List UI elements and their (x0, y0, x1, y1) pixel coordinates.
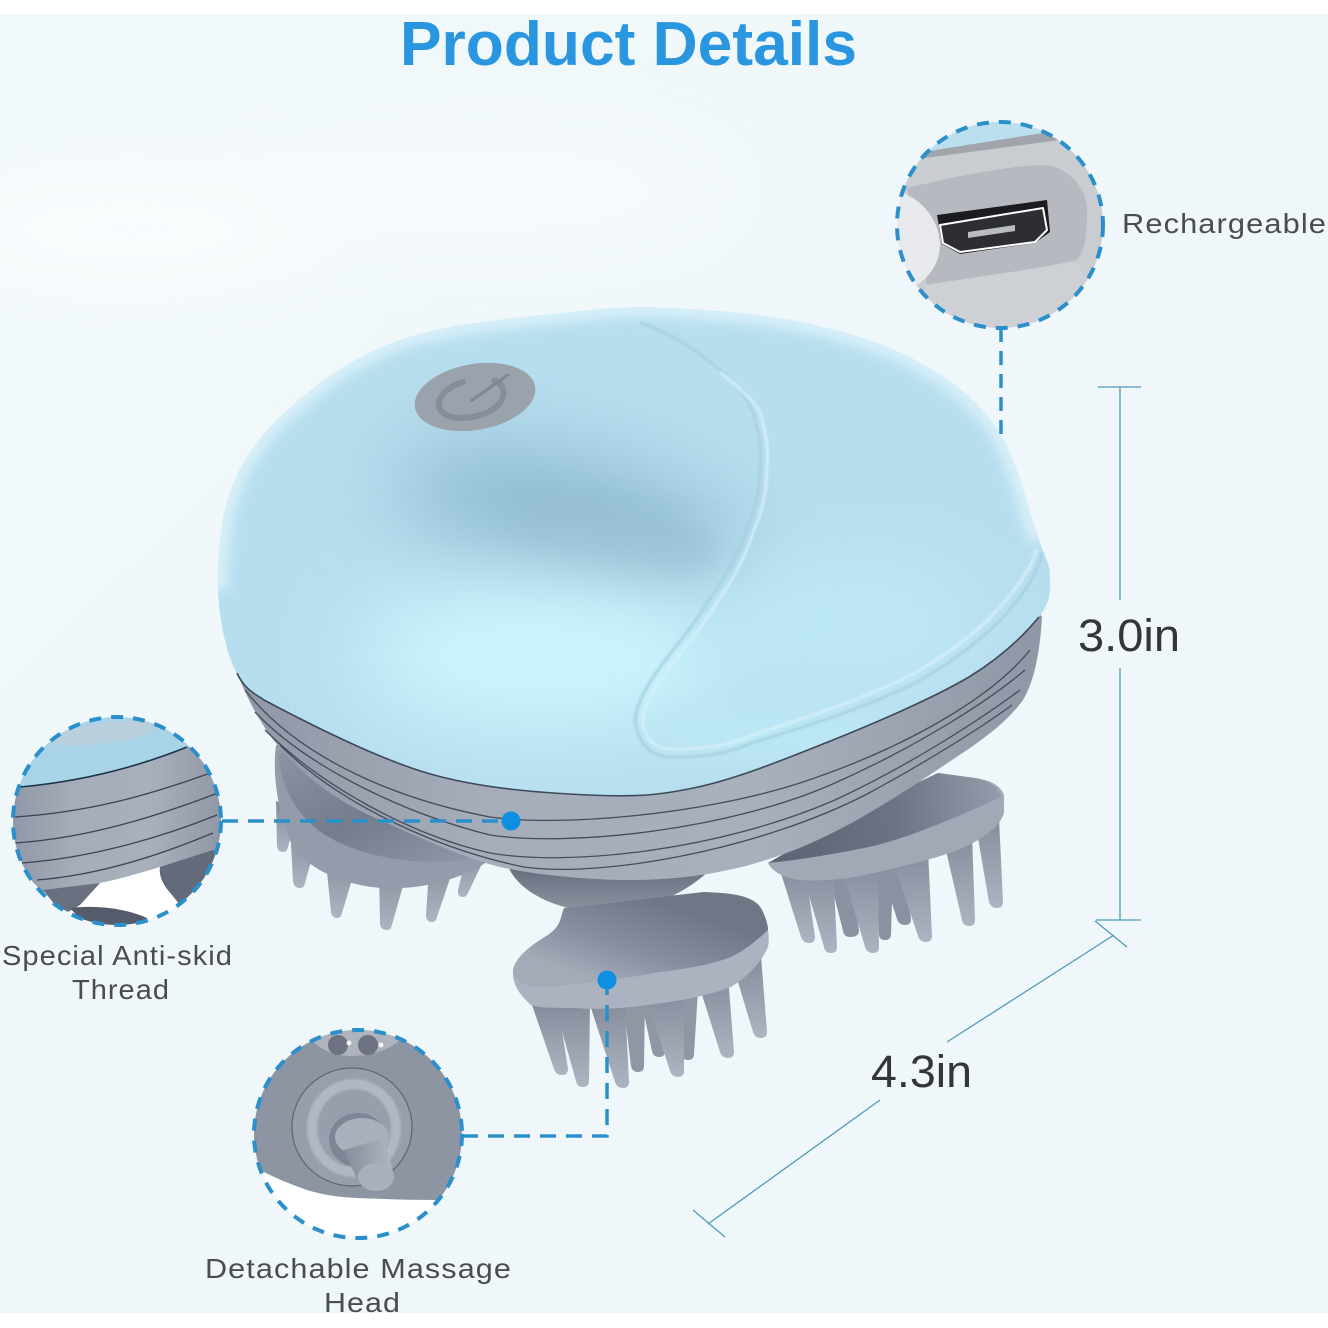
product: massage head, rear left (275, 745, 500, 930)
label: rechargeable: Rechargeable (1122, 208, 1327, 239)
icon: power button (409, 354, 541, 440)
label: special anti-skid thread: Special Anti-skid (2, 940, 233, 971)
product: ball joint (508, 866, 712, 912)
inset: rechargeable port (895, 120, 1105, 330)
label: detachable massage head: Head (324, 1287, 401, 1318)
connector: rechargeable (999, 328, 1003, 438)
product: massage head, right (768, 773, 1004, 953)
product: blue shell (218, 307, 1050, 797)
label: special anti-skid thread: Thread (72, 974, 170, 1005)
shell edge highlight (218, 307, 1039, 590)
dimension: width (693, 921, 1127, 1237)
label: detachable massage head (205, 1253, 512, 1318)
connector: anti-skid thread (222, 812, 520, 830)
label: special anti-skid thread (2, 940, 233, 1005)
crease on shell (635, 322, 1042, 757)
label: detachable massage head: Detachable Massage (205, 1253, 512, 1284)
product: massage head, front (513, 892, 769, 1088)
inset: detachable head (250, 1026, 466, 1242)
title: Product Details (400, 10, 857, 79)
inset: anti-skid thread (10, 715, 225, 935)
dimension: height: 3.0in (1078, 610, 1180, 661)
product: grey threaded base (237, 560, 1042, 880)
dimension: height (1078, 387, 1180, 920)
dimension: width: 4.3in (871, 1046, 972, 1097)
connector: massage head (462, 970, 616, 1136)
